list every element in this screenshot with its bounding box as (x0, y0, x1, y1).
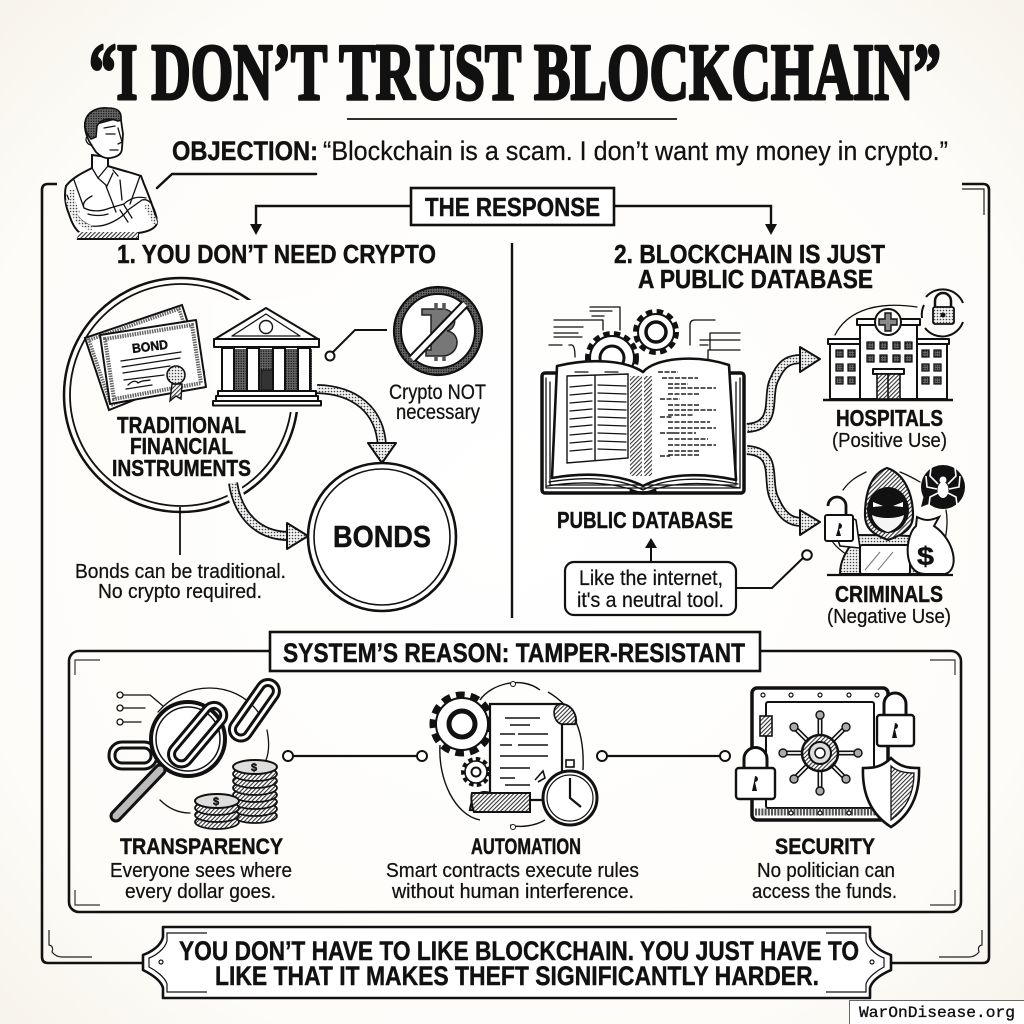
automation text (386, 834, 639, 903)
panel: system's reason (69, 632, 961, 912)
hospitals label (832, 405, 947, 452)
bonds note text (75, 561, 286, 603)
transparency text (110, 834, 292, 903)
security text: No politician can (757, 860, 895, 882)
heading: you don't need crypto: 1. YOU DON’T NEED CRYPTO (117, 239, 436, 269)
bonds note leader (179, 507, 181, 555)
criminals label: CRIMINALS (835, 581, 943, 607)
heading: blockchain is just a public database (614, 239, 885, 294)
icon: bond certificates: BOND (131, 337, 169, 356)
panel: public database (542, 289, 965, 628)
title underline (347, 118, 677, 120)
crypto not necessary text (389, 381, 486, 424)
arrow: instruments to bonds (233, 483, 308, 549)
icon: safe with locks and shield (736, 688, 919, 827)
icon: hospital (823, 305, 953, 400)
criminals label: (Negative Use) (827, 606, 951, 628)
security text: SECURITY (775, 834, 875, 859)
callout leader line (736, 550, 812, 588)
arrow: database to criminals (747, 450, 820, 535)
objection leader line (157, 174, 316, 188)
panel: you don't need crypto (64, 278, 486, 611)
criminals label (827, 581, 951, 628)
traditional financial instruments label: FINANCIAL (130, 433, 233, 459)
automation text: Smart contracts execute rules (386, 860, 639, 882)
objection text: “Blockchain is a scam. I don’t want my money in crypto.” (323, 136, 948, 166)
icon: gears and code (549, 307, 740, 381)
system's reason label (270, 632, 760, 671)
icon: automation scroll, gears, stopwatch (435, 682, 597, 830)
traditional financial instruments label: TRADITIONAL (117, 412, 246, 438)
icon: open book (542, 359, 744, 494)
arrow up to public database (645, 538, 657, 562)
icon: spider badge (921, 465, 965, 509)
neutral tool callout (565, 562, 736, 615)
traditional financial instruments label: INSTRUMENTS (112, 455, 251, 481)
arrow: database to hospitals (747, 347, 820, 428)
panel frame (69, 651, 961, 912)
icon: transparency magnifier, chain and coins: $ (251, 762, 257, 774)
icon: hooded criminal: $ (917, 541, 935, 571)
closing banner (143, 927, 891, 998)
the response label with arrows: THE RESPONSE (425, 192, 600, 222)
crypto not necessary text: necessary (396, 401, 480, 424)
bonds circle: BONDS (333, 519, 431, 554)
neutral tool callout: Like the internet, (579, 567, 723, 590)
automation text: AUTOMATION (471, 834, 581, 859)
icon: transparency magnifier, chain and coins: $ (213, 796, 219, 808)
system's reason label: SYSTEM’S REASON: TAMPER-RESISTANT (283, 638, 745, 668)
closing banner: LIKE THAT IT MAKES THEFT SIGNIFICANTLY HARDER. (215, 961, 819, 991)
arrow: bank to bonds (317, 389, 396, 463)
bonds circle (308, 463, 456, 611)
icon: bank (213, 308, 321, 406)
icon: man with crossed arms (65, 108, 157, 239)
automation text: without human interference. (391, 881, 634, 903)
bonds note text: No crypto required. (98, 581, 262, 603)
the response label with arrows (250, 188, 777, 235)
traditional financial instruments label (112, 412, 251, 481)
icon: hooded criminal (825, 468, 954, 575)
transparency text: Everyone sees where (110, 860, 292, 882)
security text (752, 834, 897, 903)
icon: bond certificates (85, 305, 206, 410)
security text: access the funds. (752, 881, 897, 903)
transparency text: every dollar goes. (125, 881, 276, 903)
crypto not necessary text: Crypto NOT (389, 381, 486, 404)
closing banner: YOU DON’T HAVE TO LIKE BLOCKCHAIN. YOU JUST HAVE TO (179, 936, 859, 966)
heading: blockchain is just a public database: 2. BLOCKCHAIN IS JUST (614, 239, 885, 269)
objection text: OBJECTION: (172, 136, 318, 166)
neutral tool callout: it's a neutral tool. (577, 589, 724, 612)
automation to security connector (597, 751, 730, 761)
hospitals label: (Positive Use) (832, 430, 947, 452)
transparency to automation connector (283, 751, 427, 761)
column divider (511, 243, 513, 618)
public database label: PUBLIC DATABASE (557, 507, 733, 533)
icon: transparency magnifier, chain and coins (112, 679, 280, 829)
outer frame (42, 184, 989, 963)
traditional instruments circle (64, 278, 327, 512)
icon: crossed out bitcoin (394, 287, 482, 375)
watermark (850, 1000, 1024, 1024)
transparency text: TRANSPARENCY (120, 834, 283, 859)
watermark: WarOnDisease.org (859, 1004, 1015, 1022)
heading: blockchain is just a public database: A PUBLIC DATABASE (638, 264, 873, 294)
hospitals label: HOSPITALS (836, 405, 943, 431)
crypto leader line (326, 330, 387, 360)
icon: lock with refresh arrows (922, 289, 963, 336)
bonds note text: Bonds can be traditional. (75, 561, 286, 583)
